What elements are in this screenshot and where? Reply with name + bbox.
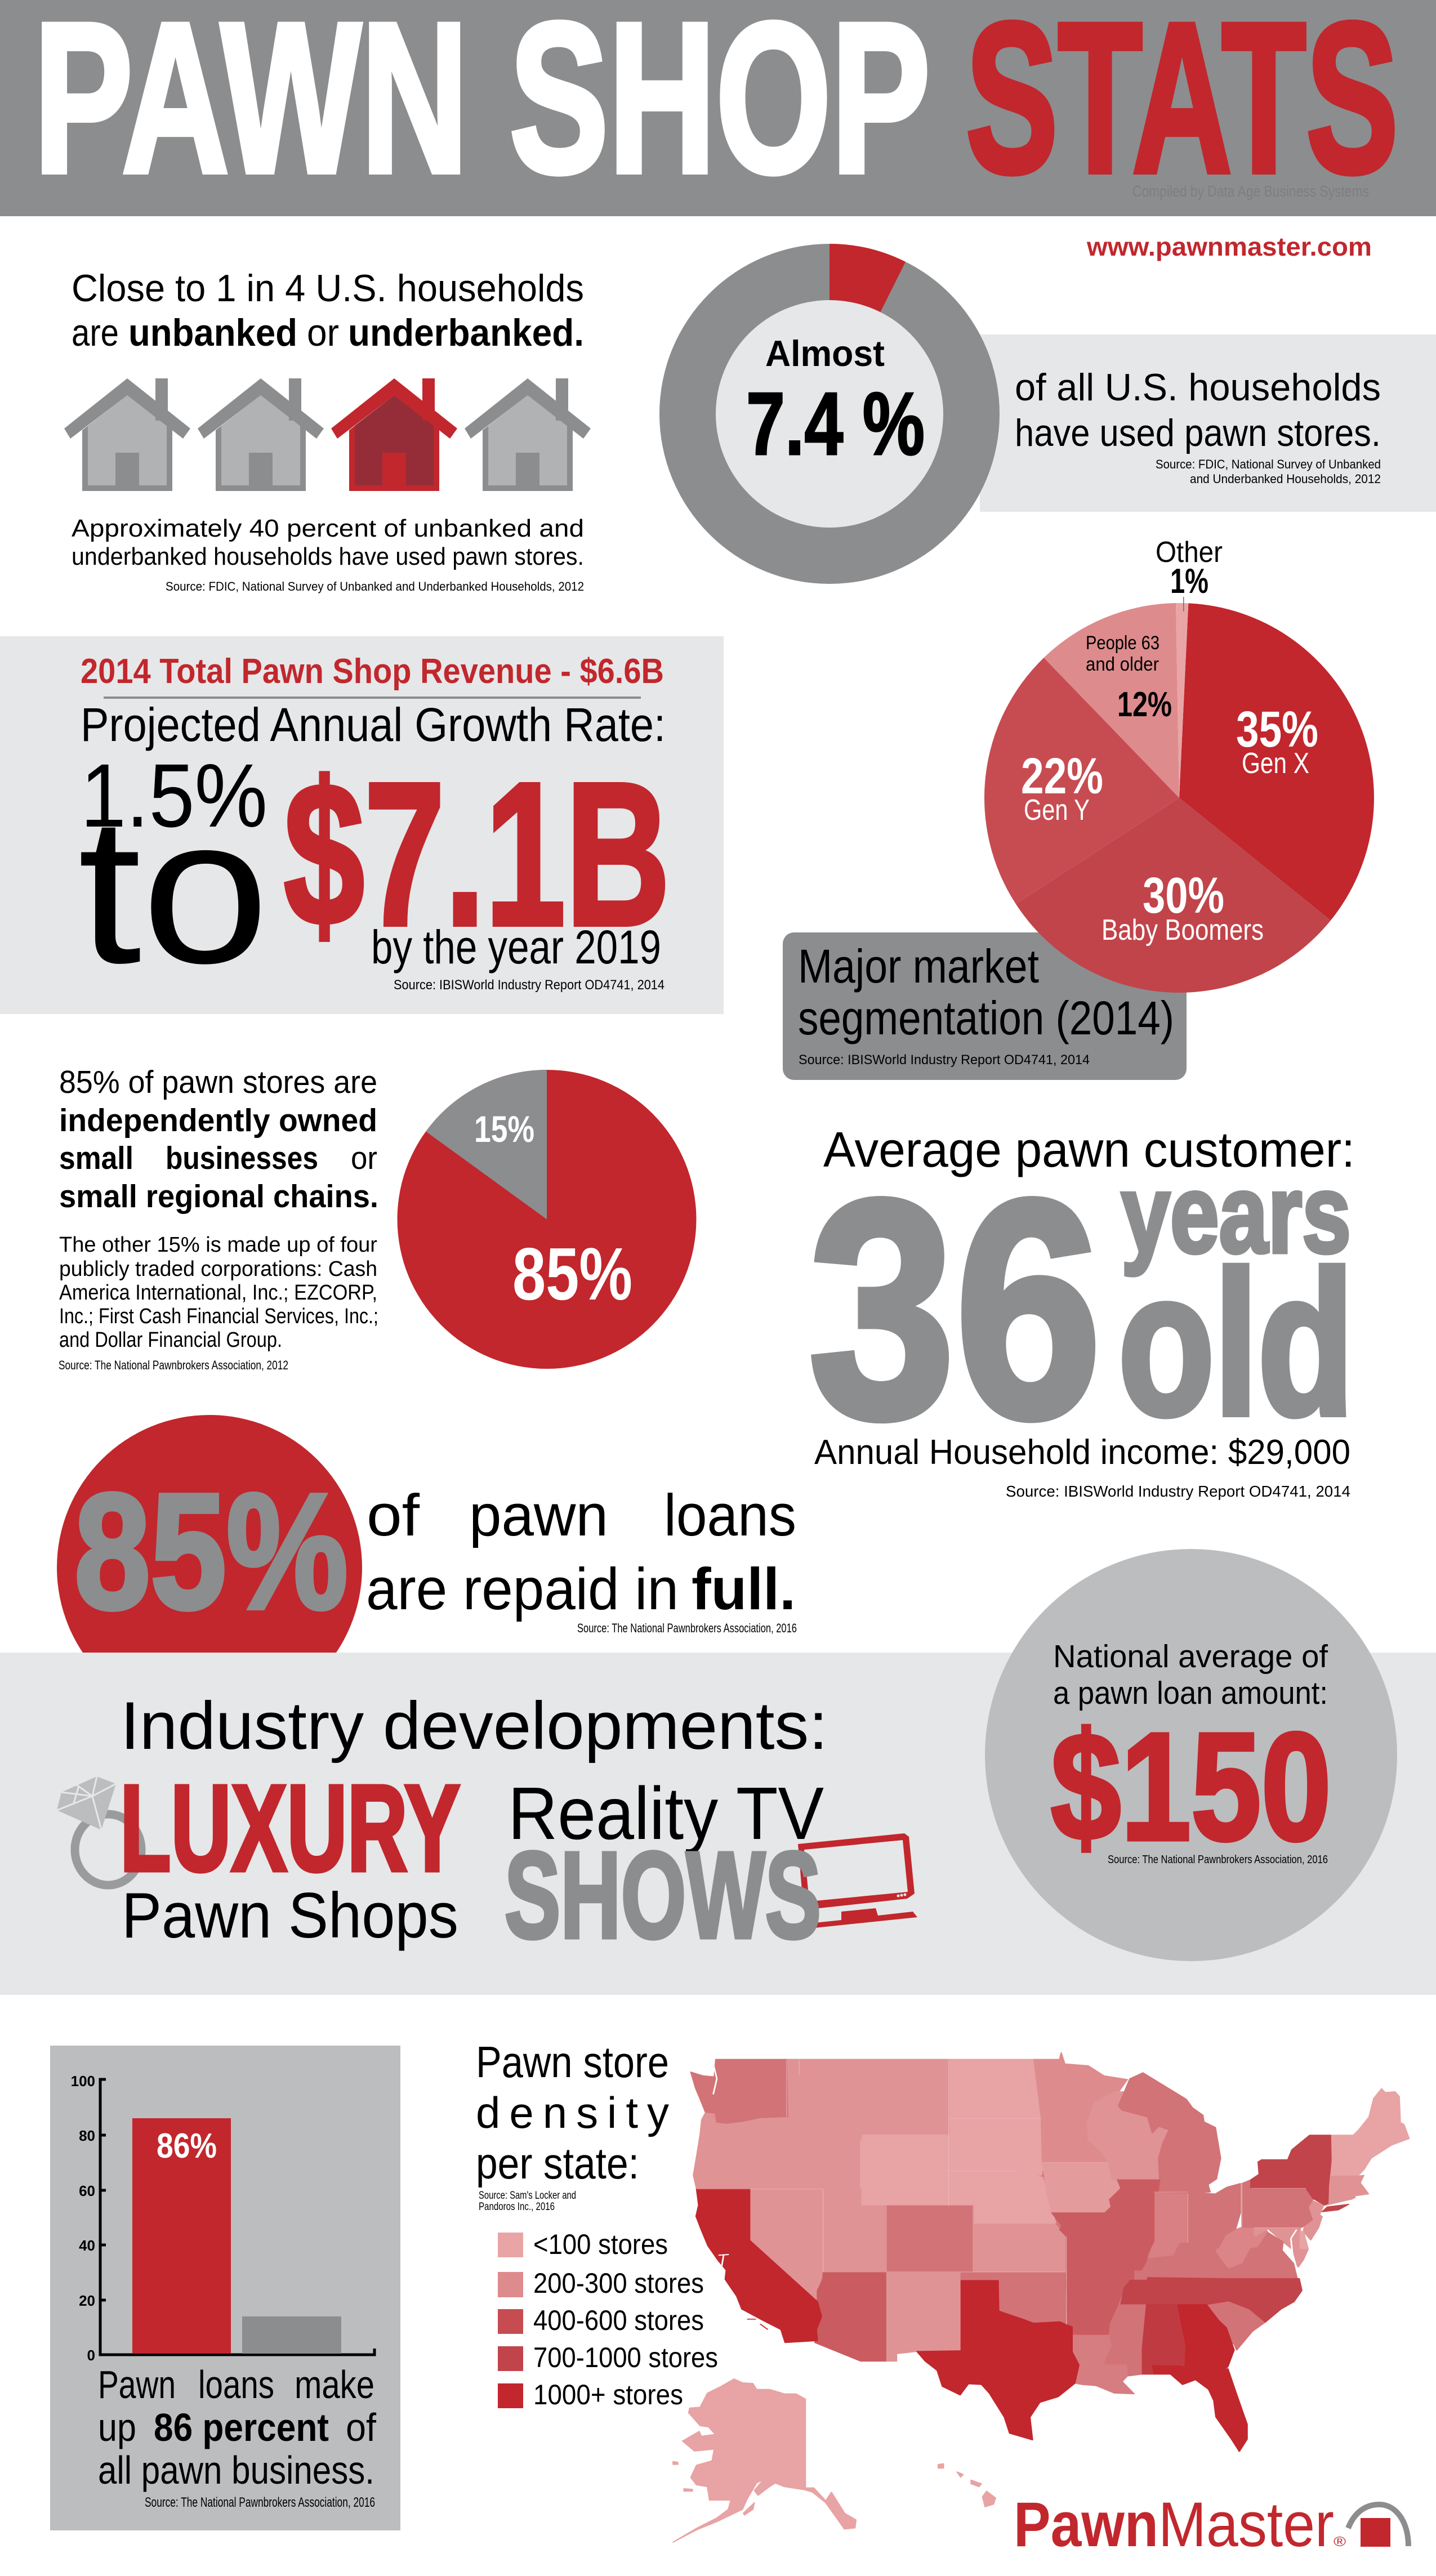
bar chart: 40: [79, 2237, 95, 2254]
logo: pawnmaster: Pawn: [1014, 2489, 1158, 2560]
panel: households strip: [980, 334, 1436, 512]
pie chart: market segments: [984, 536, 1374, 993]
paragraph: [59, 1233, 378, 1352]
heading: Average pawn customer:: [823, 1122, 1355, 1177]
value: 36: 36: [809, 1136, 1101, 1482]
text: of all households: of all U.S. households: [1015, 366, 1381, 409]
legend: 400-600 stores: [533, 2305, 704, 2336]
map: store density by state: [673, 2053, 1409, 2542]
icon: red house: [331, 378, 457, 491]
label: market segmentation: Source: IBISWorld Industry Report OD4741, 2014: [799, 1052, 1090, 1068]
heading: Industry developments:: [121, 1688, 828, 1764]
paragraph: America International, Inc.; EZCORP,: [59, 1281, 377, 1305]
label: gen y: Gen Y: [1024, 794, 1090, 827]
source: Pandoros Inc., 2016: [479, 2201, 555, 2213]
heading: pawn store density: per state:: [476, 2139, 639, 2188]
heading lines: 85% of pawn stores are: [59, 1064, 377, 1100]
text: of all households: have used pawn stores.: [1015, 412, 1381, 454]
icon: television: [798, 1833, 917, 1928]
panel: industry developments: [0, 1653, 1436, 1995]
heading: pawn store density: Pawn store: [476, 2037, 669, 2087]
pie chart: 85 percent independent: [398, 1070, 696, 1369]
label: other: [1156, 536, 1223, 601]
text: pawn shops: Pawn Shops: [122, 1880, 458, 1952]
heading: pawn store density: [476, 2037, 669, 2213]
text: loans repaid: of: [367, 1483, 420, 1548]
source: [479, 2190, 576, 2213]
text: pawn loans 86 percent: make: [295, 2363, 374, 2407]
tier: over 1000 stores: [696, 2189, 1247, 2452]
text: pawn loans 86 percent: of: [346, 2405, 376, 2449]
text: pawn loans 86 percent: all pawn business.: [98, 2448, 374, 2492]
heading lines: [59, 1064, 378, 1215]
tier: mid density: [691, 2059, 1313, 2394]
panel: revenue: [0, 636, 724, 1014]
source: and Underbanked Households, 2012: [1190, 472, 1381, 486]
source: Source: FDIC, National Survey of Unbanked and Underbanked Households, 2012: [166, 579, 584, 593]
bar chart: 0: [87, 2347, 95, 2364]
value: 7.4 percent: 7.4 %: [746, 374, 925, 474]
word: old: old: [1118, 1229, 1354, 1457]
label: baby boomers: 30%: [1143, 868, 1224, 924]
paragraph: Inc.; First Cash Financial Services, Inc.;: [59, 1305, 378, 1328]
coastal inlets: [713, 2064, 1296, 2270]
text: pawn loans 86 percent: 86 percent: [154, 2405, 329, 2449]
value: 1.5 percent: 1.5%: [81, 745, 267, 846]
bar chart: 86%: [157, 2127, 217, 2166]
text: loans repaid: loans: [664, 1483, 796, 1548]
text: by the year: by the year 2019: [371, 921, 661, 974]
compiled credit: Compiled by Data Age Business Systems: [1132, 182, 1369, 200]
panel: unbanked households: [64, 267, 591, 593]
panel: pawn loans bar chart: [50, 2046, 400, 2530]
icon: house 1: [64, 378, 190, 491]
bar chart: 60: [79, 2182, 95, 2199]
label: gen x: 35%: [1236, 702, 1318, 758]
label: gen y: [1021, 748, 1103, 827]
heading: pawn store density: density: [476, 2088, 669, 2137]
label: baby boomers: [1101, 868, 1264, 947]
word: years: years: [1121, 1151, 1351, 1276]
text: loans repaid: [366, 1483, 797, 1635]
heading: close to 1 in 4: [72, 267, 584, 354]
heading lines: small regional chains.: [59, 1178, 378, 1215]
heading lines: small: [59, 1140, 133, 1176]
label: other: 1%: [1170, 562, 1208, 601]
text: 40 percent: underbanked households have used pawn stores.: [72, 543, 584, 570]
text: of all households: [1015, 366, 1381, 454]
tier: 200 to 300 stores: [693, 2053, 1368, 2361]
label: people 63 and older: People 63: [1086, 632, 1159, 654]
state border lines: [697, 2059, 1306, 2325]
paragraph: publicly traded corporations: Cash: [59, 1257, 377, 1281]
text: pawn loans 86 percent: up: [98, 2405, 136, 2449]
label: other: Other: [1156, 536, 1223, 569]
source: Source: The National Pawnbrokers Association, 2016: [577, 1621, 797, 1635]
source: Source: FDIC, National Survey of Unbanked: [1156, 457, 1381, 471]
text: 40 percent: [72, 515, 584, 570]
value: 15 percent: 15%: [474, 1108, 534, 1150]
source: Source: The National Pawnbrokers Association, 2012: [59, 1358, 288, 1372]
bar chart: 80: [79, 2127, 95, 2144]
label: people 63 and older: and older: [1086, 654, 1159, 675]
bar chart: 100: [71, 2073, 95, 2090]
panel: average customer: [809, 1122, 1355, 1500]
word: luxury: LUXURY: [120, 1760, 460, 1897]
icon: house 4: [465, 378, 591, 491]
source: Source: The National Pawnbrokers Association, 2016: [1108, 1854, 1328, 1866]
header band: [0, 0, 1436, 217]
logo: pawnmaster: ®: [1334, 2534, 1346, 2550]
heading: total revenue: 2014 Total Pawn Shop Revenue - $6.6B: [81, 652, 664, 691]
paragraph: The other 15% is made up of four: [59, 1233, 377, 1257]
text: loans repaid: full.: [692, 1556, 796, 1622]
tier: under 100 stores: [673, 2059, 1409, 2542]
label: gen x: Gen X: [1242, 747, 1309, 780]
heading lines: independently owned: [59, 1102, 377, 1139]
heading: close to 1 in 4: unbanked: [128, 311, 297, 354]
text: reality tv: Reality TV: [508, 1772, 824, 1855]
text: national average: National average of: [1053, 1639, 1328, 1675]
website url: www.pawnmaster.com: [1086, 232, 1372, 261]
circle: 85 percent repaid: 85%: [74, 1459, 348, 1643]
source: Source: The National Pawnbrokers Association, 2016: [145, 2495, 375, 2510]
word: shows: SHOWS: [505, 1827, 821, 1964]
text: loans repaid: pawn: [469, 1483, 608, 1548]
label: people 63 and older: 12%: [1117, 685, 1172, 724]
text: pawn loans 86 percent: loans: [198, 2363, 274, 2407]
value: 7.1B: $7.1B: [284, 740, 670, 968]
legend: [498, 2229, 718, 2410]
heading lines: businesses: [166, 1140, 318, 1176]
heading: close to 1 in 4: underbanked.: [348, 311, 584, 354]
label: gen y: 22%: [1021, 748, 1103, 805]
paragraph: and Dollar Financial Group.: [59, 1328, 282, 1352]
source: Source: Sam's Locker and: [479, 2190, 576, 2202]
logo: pawnmaster: Master: [1158, 2489, 1334, 2560]
label: baby boomers: Baby Boomers: [1101, 914, 1264, 947]
bar chart: [71, 2073, 374, 2364]
word: to: to: [78, 774, 269, 1007]
tier: 400 to 600 stores: [815, 2180, 1159, 2361]
label: market segmentation: Major market: [798, 940, 1039, 993]
label: market segmentation: [783, 932, 1187, 1080]
source: Source: IBISWorld Industry Report OD4741, 2014: [1006, 1483, 1350, 1500]
label: market segmentation: segmentation (2014): [798, 992, 1174, 1044]
icon: house 2: [198, 378, 324, 491]
heading: close to 1 in 4: Close to 1 in 4 U.S. households: [72, 267, 584, 310]
label: people 63 and older: [1086, 632, 1172, 724]
bar chart: 20: [79, 2292, 95, 2309]
text: pawn loans 86 percent: [98, 2363, 376, 2492]
text: national average: a pawn loan amount:: [1053, 1675, 1328, 1711]
heading: close to 1 in 4: are: [72, 311, 119, 354]
legend: 1000+ stores: [533, 2379, 683, 2410]
heading: close to 1 in 4: or: [307, 311, 339, 354]
value: 150 dollars: $150: [1051, 1701, 1331, 1872]
value: 85 percent: 85%: [512, 1233, 632, 1315]
map underlay: [724, 2142, 1270, 2365]
text: pawn loans 86 percent: Pawn: [98, 2363, 176, 2407]
logo: pawnmaster: [1014, 2489, 1408, 2560]
heading lines: or: [351, 1140, 377, 1176]
text block: independently owned: [59, 1064, 378, 1372]
text: loans repaid: are repaid in: [366, 1556, 679, 1622]
tier: 700 to 1000 stores: [1121, 2135, 1349, 2374]
icon: diamond ring: [57, 1776, 141, 1885]
legend: 700-1000 stores: [533, 2342, 718, 2373]
text: annual income: Annual Household income: $29,000: [814, 1433, 1350, 1472]
heading: growth rate: Projected Annual Growth Rate:: [81, 698, 666, 751]
legend: 200-300 stores: [533, 2267, 704, 2299]
label: almost: Almost: [765, 333, 885, 374]
source: Source: IBISWorld Industry Report OD4741, 2014: [394, 977, 665, 993]
legend: <100 stores: [533, 2229, 668, 2260]
text: national average: [1053, 1639, 1328, 1711]
donut chart: 7.4 percent: [659, 244, 1000, 584]
label: gen x: [1236, 702, 1318, 780]
text: 40 percent: Approximately 40 percent of unbanked and: [72, 515, 584, 542]
circle: average loan amount: [985, 1549, 1397, 1961]
source: [1156, 457, 1381, 486]
circle: 85 percent repaid: [57, 1415, 362, 1720]
